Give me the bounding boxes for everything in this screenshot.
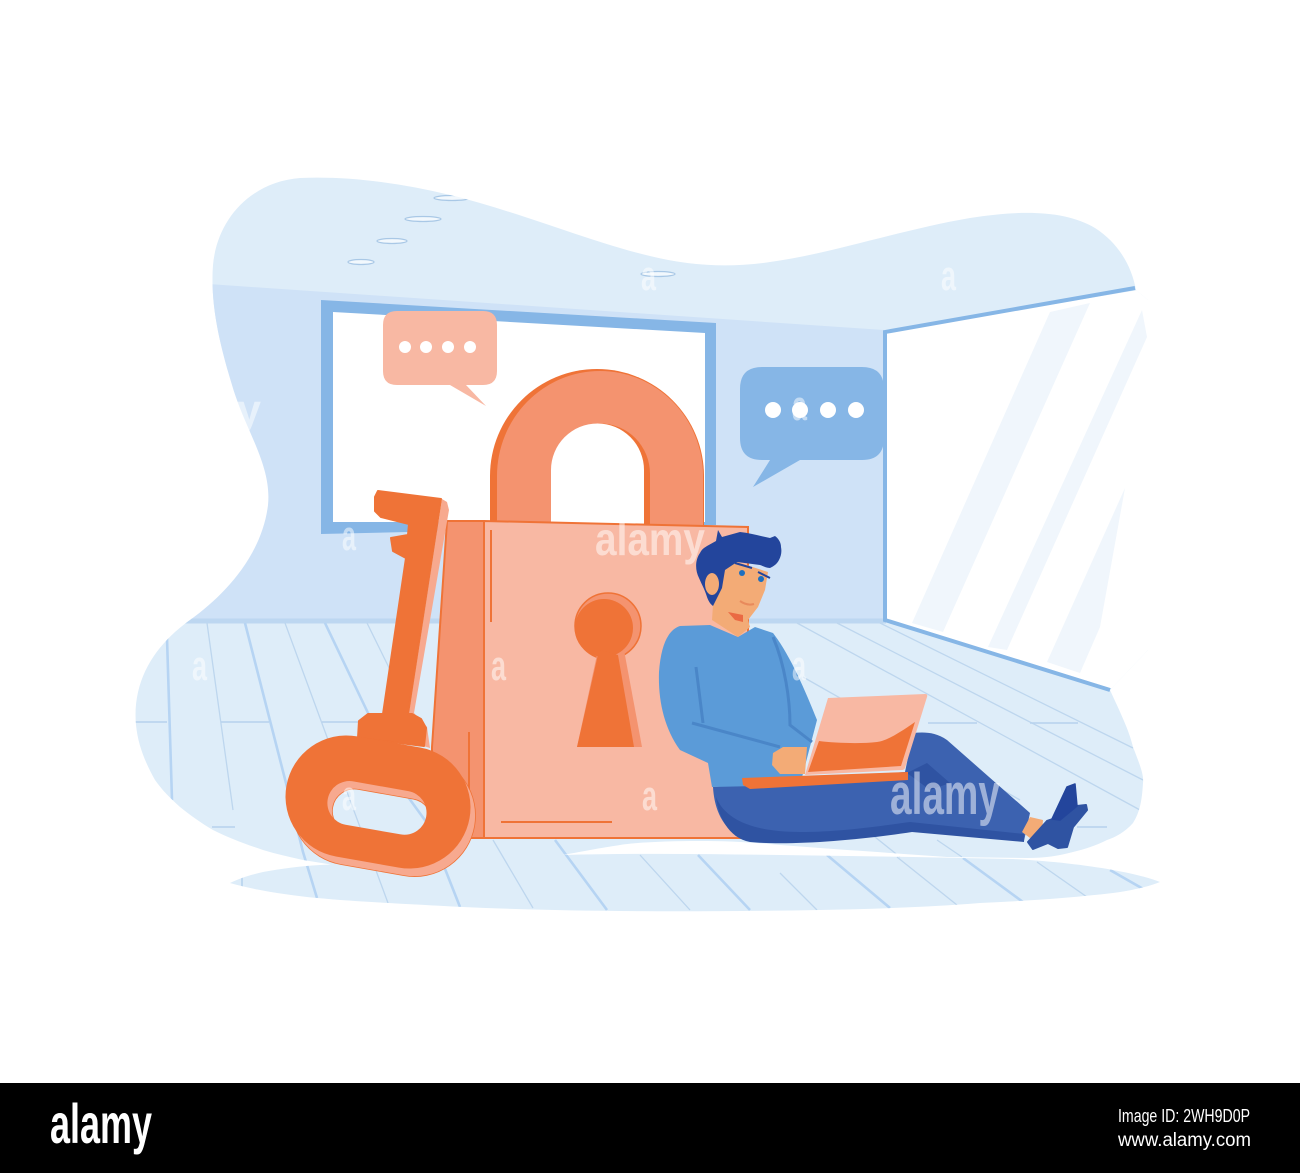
foot: [1022, 817, 1043, 838]
back wall: [190, 284, 884, 620]
side window: [885, 288, 1150, 700]
hair: [696, 530, 781, 606]
laptop lid: [805, 694, 927, 775]
watermarks: a: [792, 642, 806, 689]
watermarks: a: [342, 512, 356, 559]
key depth: [409, 499, 449, 748]
footer band: [0, 1083, 1300, 1173]
floor: [120, 620, 1160, 920]
watermarks: y: [237, 386, 262, 435]
key blade: [358, 491, 441, 746]
neck and face: [712, 562, 768, 637]
watermarks: alamy: [595, 513, 705, 565]
watermarks: a: [342, 772, 356, 819]
key: [276, 491, 485, 886]
trousers: [713, 733, 1030, 842]
key bow: [276, 726, 480, 878]
watermarks: a: [641, 252, 656, 299]
watermarks: a: [491, 642, 506, 689]
laptop base: [742, 772, 908, 789]
speech bubble: right: [740, 367, 884, 487]
watermarks: alamy: [890, 762, 1000, 827]
laptop screen: [808, 722, 915, 772]
image id: Image ID: 2WH9D0P: [1118, 1106, 1250, 1126]
sock: [1028, 784, 1087, 849]
back window: [321, 300, 716, 534]
man: [659, 530, 1087, 849]
watermarks: [192, 252, 1000, 827]
watermarks: a: [941, 252, 956, 299]
site url: www.alamy.com: [1117, 1130, 1251, 1151]
ear: [705, 573, 719, 595]
ceiling lights: [348, 196, 675, 276]
room scene: [120, 170, 1160, 920]
speech bubble: left: [383, 311, 497, 406]
watermarks: a: [642, 772, 657, 819]
watermarks: a: [792, 382, 807, 429]
padlock: [432, 369, 748, 838]
lock front: [484, 521, 748, 838]
eyes: [739, 570, 745, 576]
footer logo: alamy: [50, 1092, 152, 1155]
sweater: [659, 625, 817, 787]
shackle: [490, 369, 704, 525]
ceiling: [212, 178, 1136, 330]
watermarks: a: [192, 642, 207, 689]
floor planks: [120, 621, 1145, 910]
lock side: [432, 521, 484, 838]
hand: [772, 747, 807, 774]
keyhole: [575, 593, 642, 747]
